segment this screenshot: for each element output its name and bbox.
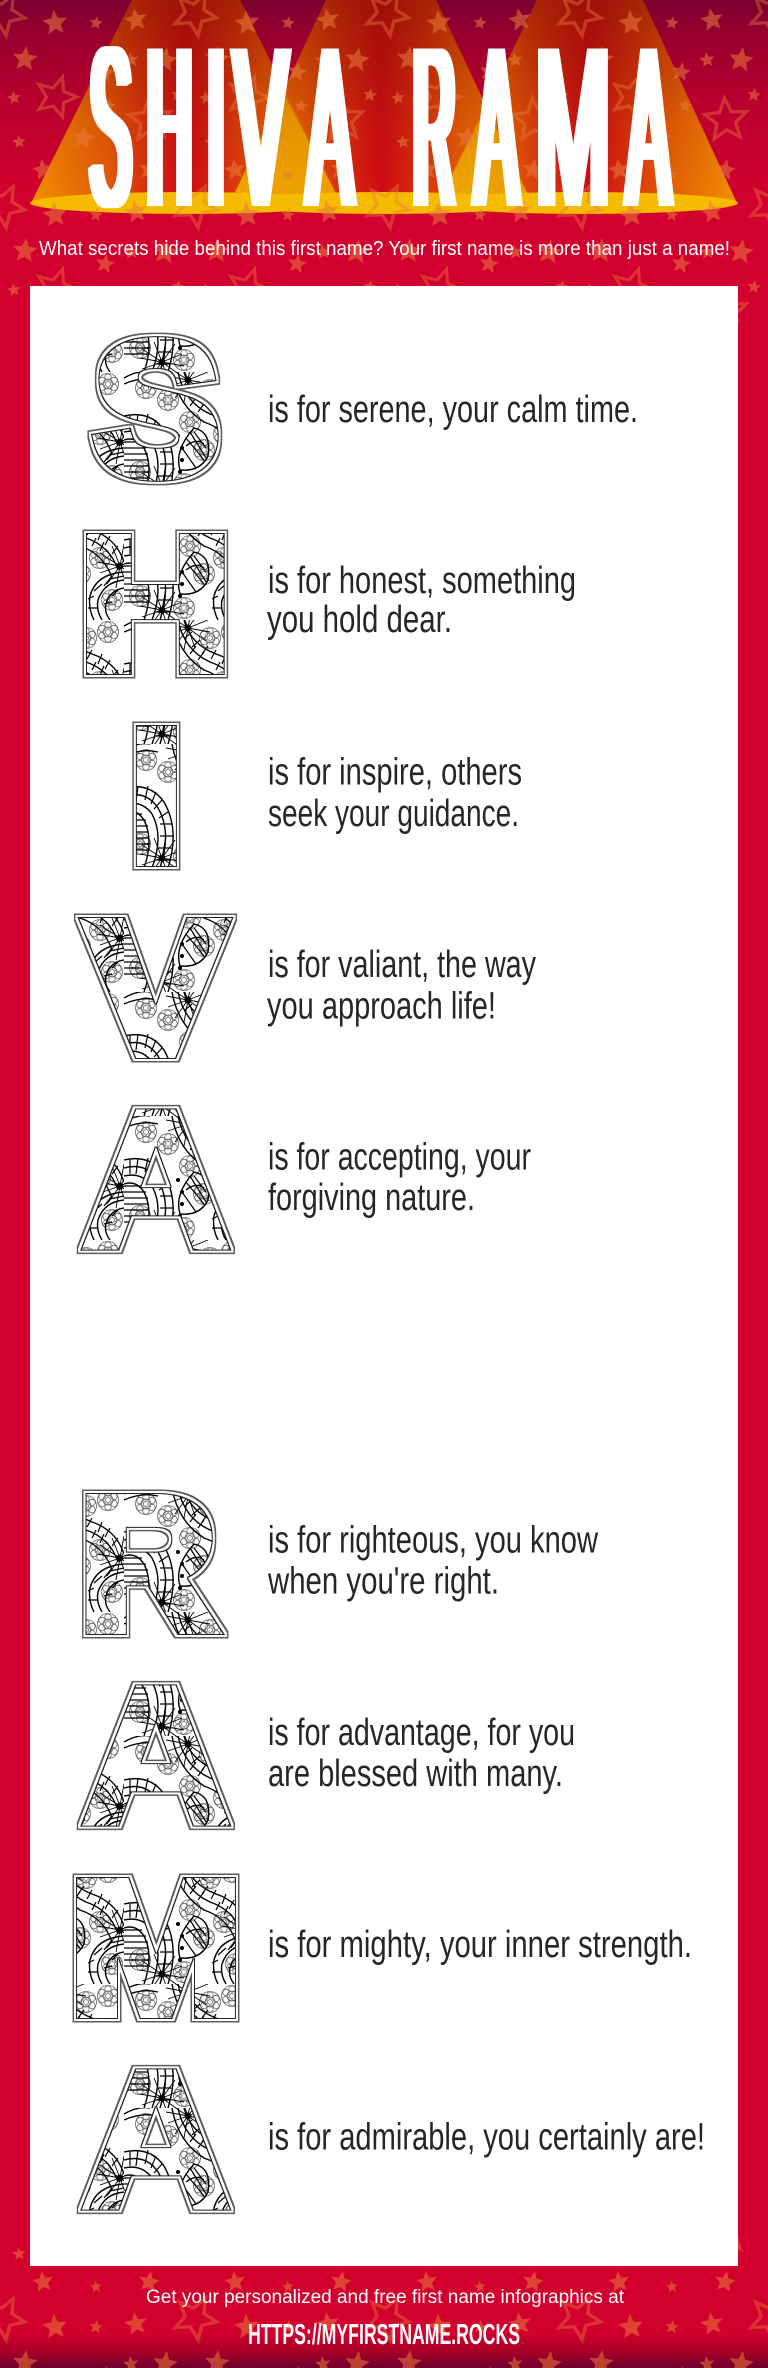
- row: A advantage: [81, 1647, 575, 1865]
- text: accepting: [268, 1136, 531, 1219]
- decorative letter A: A: [81, 2031, 231, 2249]
- star pattern bottom: [0, 2238, 768, 2368]
- text: righteous: [267, 1520, 598, 1602]
- row: A accepting: [81, 1071, 531, 1289]
- title: [90, 0, 670, 255]
- spotlight cone middle: [230, 0, 532, 203]
- decorative letter H: H: [80, 501, 231, 708]
- decorative letter V: V: [87, 885, 224, 1092]
- text: honest: [267, 560, 576, 641]
- text: righteous: is for righteous, you know: [268, 1520, 598, 1562]
- decorative letter S: S: [94, 306, 219, 513]
- row: A admirable: [81, 2031, 705, 2249]
- decorative letter M: M: [70, 1845, 242, 2052]
- star pattern top: [0, 0, 768, 322]
- row: S: [94, 306, 638, 513]
- spotlight floor pools: [30, 192, 738, 214]
- title: A: [475, 0, 518, 255]
- text: inspire: is for inspire, others: [268, 752, 522, 794]
- footer url: HTTPS://MYFIRSTNAME.ROCKS: [248, 2319, 520, 2351]
- decorative letter I: I: [130, 693, 182, 900]
- cone overlap left: [230, 92, 341, 203]
- row: I: [130, 693, 522, 900]
- text: valiant: [267, 944, 536, 1028]
- title: A: [307, 0, 353, 255]
- row: V: [87, 885, 536, 1092]
- spotlight cone right: [438, 0, 737, 203]
- text: honest: you hold dear.: [267, 599, 452, 641]
- decorative letter A: A: [81, 1071, 231, 1289]
- decorative letter A: A: [81, 1647, 231, 1865]
- white content panel: [30, 286, 738, 2266]
- cone overlap right: [438, 108, 532, 203]
- cone top shading: [56, 0, 714, 166]
- text: advantage: [268, 1712, 575, 1795]
- text: accepting: forgiving nature.: [268, 1177, 475, 1219]
- text: honest: is for honest, something: [268, 560, 576, 602]
- title: V: [234, 0, 288, 255]
- spotlights header art: [0, 0, 768, 214]
- row: M: [70, 1845, 692, 2052]
- spotlight cone left: [31, 0, 341, 203]
- decorative letter R: R: [80, 1461, 216, 1668]
- text: inspire: seek your guidance.: [268, 793, 519, 835]
- row: H: [80, 501, 576, 708]
- text: righteous: when you're right.: [267, 1560, 499, 1602]
- footer note: Get your personalized and free first name infographics at: [146, 2287, 625, 2308]
- text: inspire: [268, 752, 522, 835]
- text: advantage: are blessed with many.: [268, 1753, 563, 1795]
- title: R: [413, 0, 455, 255]
- text: serene: is for serene, your calm time.: [268, 389, 638, 431]
- title: S: [90, 0, 131, 255]
- text: valiant: you approach life!: [267, 986, 496, 1028]
- text: advantage: is for advantage, for you: [268, 1712, 575, 1754]
- title: H: [147, 0, 192, 255]
- title: I: [208, 0, 224, 255]
- subtitle: What secrets hide behind this first name? Your first name is more than just a name!: [39, 238, 730, 260]
- title: M: [536, 0, 610, 255]
- text: accepting: is for accepting, your: [268, 1136, 531, 1178]
- text: valiant: is for valiant, the way: [268, 944, 536, 986]
- row: R: [80, 1461, 598, 1668]
